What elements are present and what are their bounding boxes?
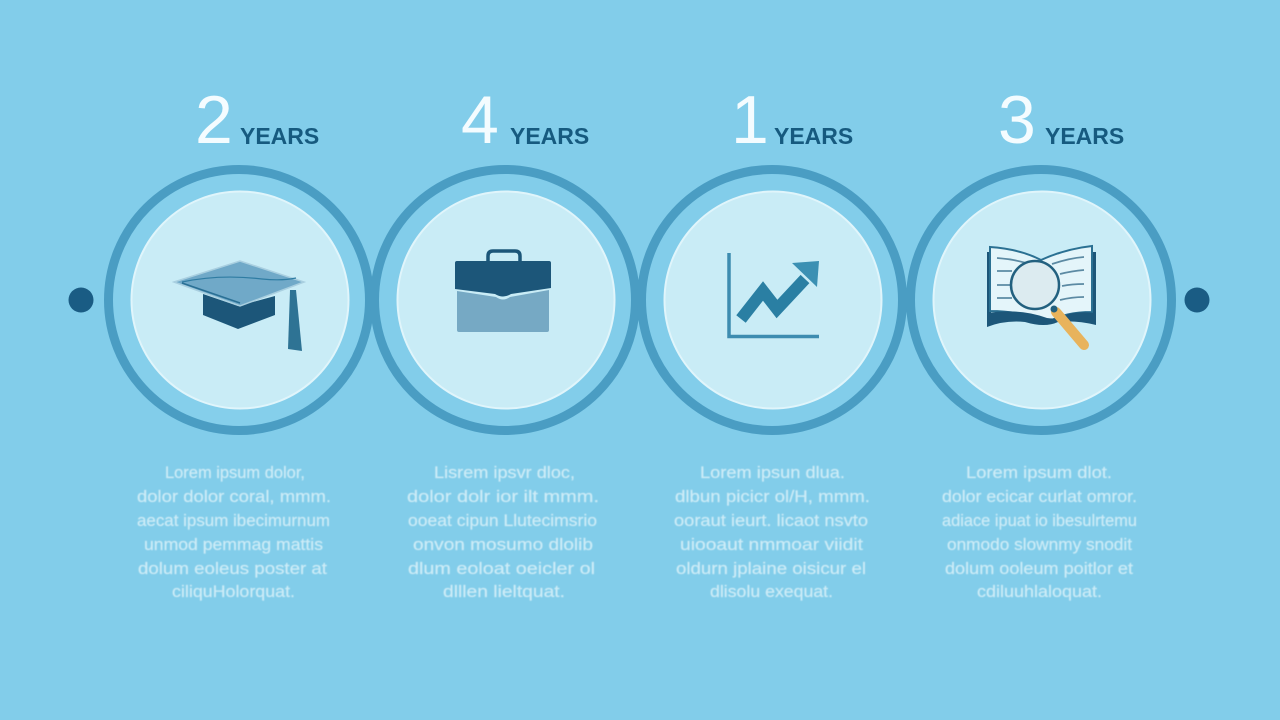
left timeline dot xyxy=(68,288,94,312)
heading: 3 years: 3 xyxy=(998,82,1036,158)
text block: step 1 description xyxy=(137,463,331,601)
text block: step 1 description: aecat ipsum ibecimurnum xyxy=(137,511,330,530)
text block: step 3 description: oldurn jplaine oisicur el xyxy=(676,559,866,578)
step 1 circle xyxy=(108,170,370,430)
text block: step 2 description: dolor dolr ior ilt mmm. xyxy=(407,487,599,506)
right timeline dot xyxy=(1184,288,1210,312)
heading: 4 years xyxy=(461,82,589,158)
text block: step 3 description: ooraut ieurt. licaot nsvto xyxy=(674,511,868,530)
text block: step 3 description: Lorem ipsun dlua. xyxy=(700,463,845,482)
text block: step 1 description: ciliquHolorquat. xyxy=(172,582,295,601)
icon: growth chart xyxy=(729,253,819,336)
step 2 circle xyxy=(374,170,636,430)
heading: 2 years xyxy=(195,82,319,158)
heading: 3 years xyxy=(998,82,1124,158)
text block: step 1 description: unmod pemmag mattis xyxy=(144,535,323,554)
text block: step 3 description xyxy=(674,463,870,601)
text block: step 4 description: adiace ipuat io ibesulrtemu xyxy=(942,511,1137,530)
heading: 4 years: YEARS xyxy=(510,123,589,149)
heading: 1 years xyxy=(731,82,853,158)
text block: step 1 description: dolum eoleus poster at xyxy=(138,559,327,578)
heading: 1 years: 1 xyxy=(731,82,769,158)
heading: 2 years: 2 xyxy=(195,82,233,158)
text block: step 2 description: onvon mosumo dlolib xyxy=(413,535,593,554)
heading: 2 years: YEARS xyxy=(240,123,319,149)
text block: step 3 description: uiooaut nmmoar viidit xyxy=(680,535,863,554)
text block: step 4 description: onmodo slownmy snodit xyxy=(947,535,1132,554)
heading: 1 years: YEARS xyxy=(774,123,853,149)
text block: step 2 description xyxy=(407,463,599,601)
text block: step 4 description: Lorem ipsum dlot. xyxy=(966,463,1112,482)
step 3 circle xyxy=(642,170,902,430)
heading: 4 years: 4 xyxy=(461,82,499,158)
text block: step 3 description: dlisolu exequat. xyxy=(710,582,833,601)
text block: step 3 description: dlbun picicr ol/H, mmm. xyxy=(675,487,870,506)
text block: step 4 description: dolor ecicar curlat omror. xyxy=(942,487,1137,506)
text block: step 1 description: Lorem ipsum dolor, xyxy=(165,463,305,482)
heading: 3 years: YEARS xyxy=(1045,123,1124,149)
text block: step 4 description: cdiluuhlaloquat. xyxy=(977,582,1102,601)
icon: graduation cap xyxy=(174,261,304,351)
panel: step 3 growth xyxy=(642,82,902,601)
text block: step 4 description: dolum ooleum poitlor et xyxy=(945,559,1133,578)
panel: step 4 research xyxy=(910,82,1172,601)
text block: step 1 description: dolor dolor coral, mmm. xyxy=(137,487,331,506)
icon: briefcase xyxy=(455,251,551,332)
text block: step 2 description: ooeat cipun Llutecimsrio xyxy=(408,511,597,530)
text block: step 2 description: dlum eoloat oeicler ol xyxy=(408,559,595,578)
icon: open book with magnifier xyxy=(987,246,1096,345)
text block: step 4 description xyxy=(942,463,1137,601)
text block: step 2 description: dlllen lieltquat. xyxy=(443,582,565,601)
panel: step 1 education xyxy=(108,82,370,601)
panel: step 2 career xyxy=(374,82,636,601)
text block: step 2 description: Lisrem ipsvr dloc, xyxy=(434,463,575,482)
step 4 circle xyxy=(910,170,1172,430)
